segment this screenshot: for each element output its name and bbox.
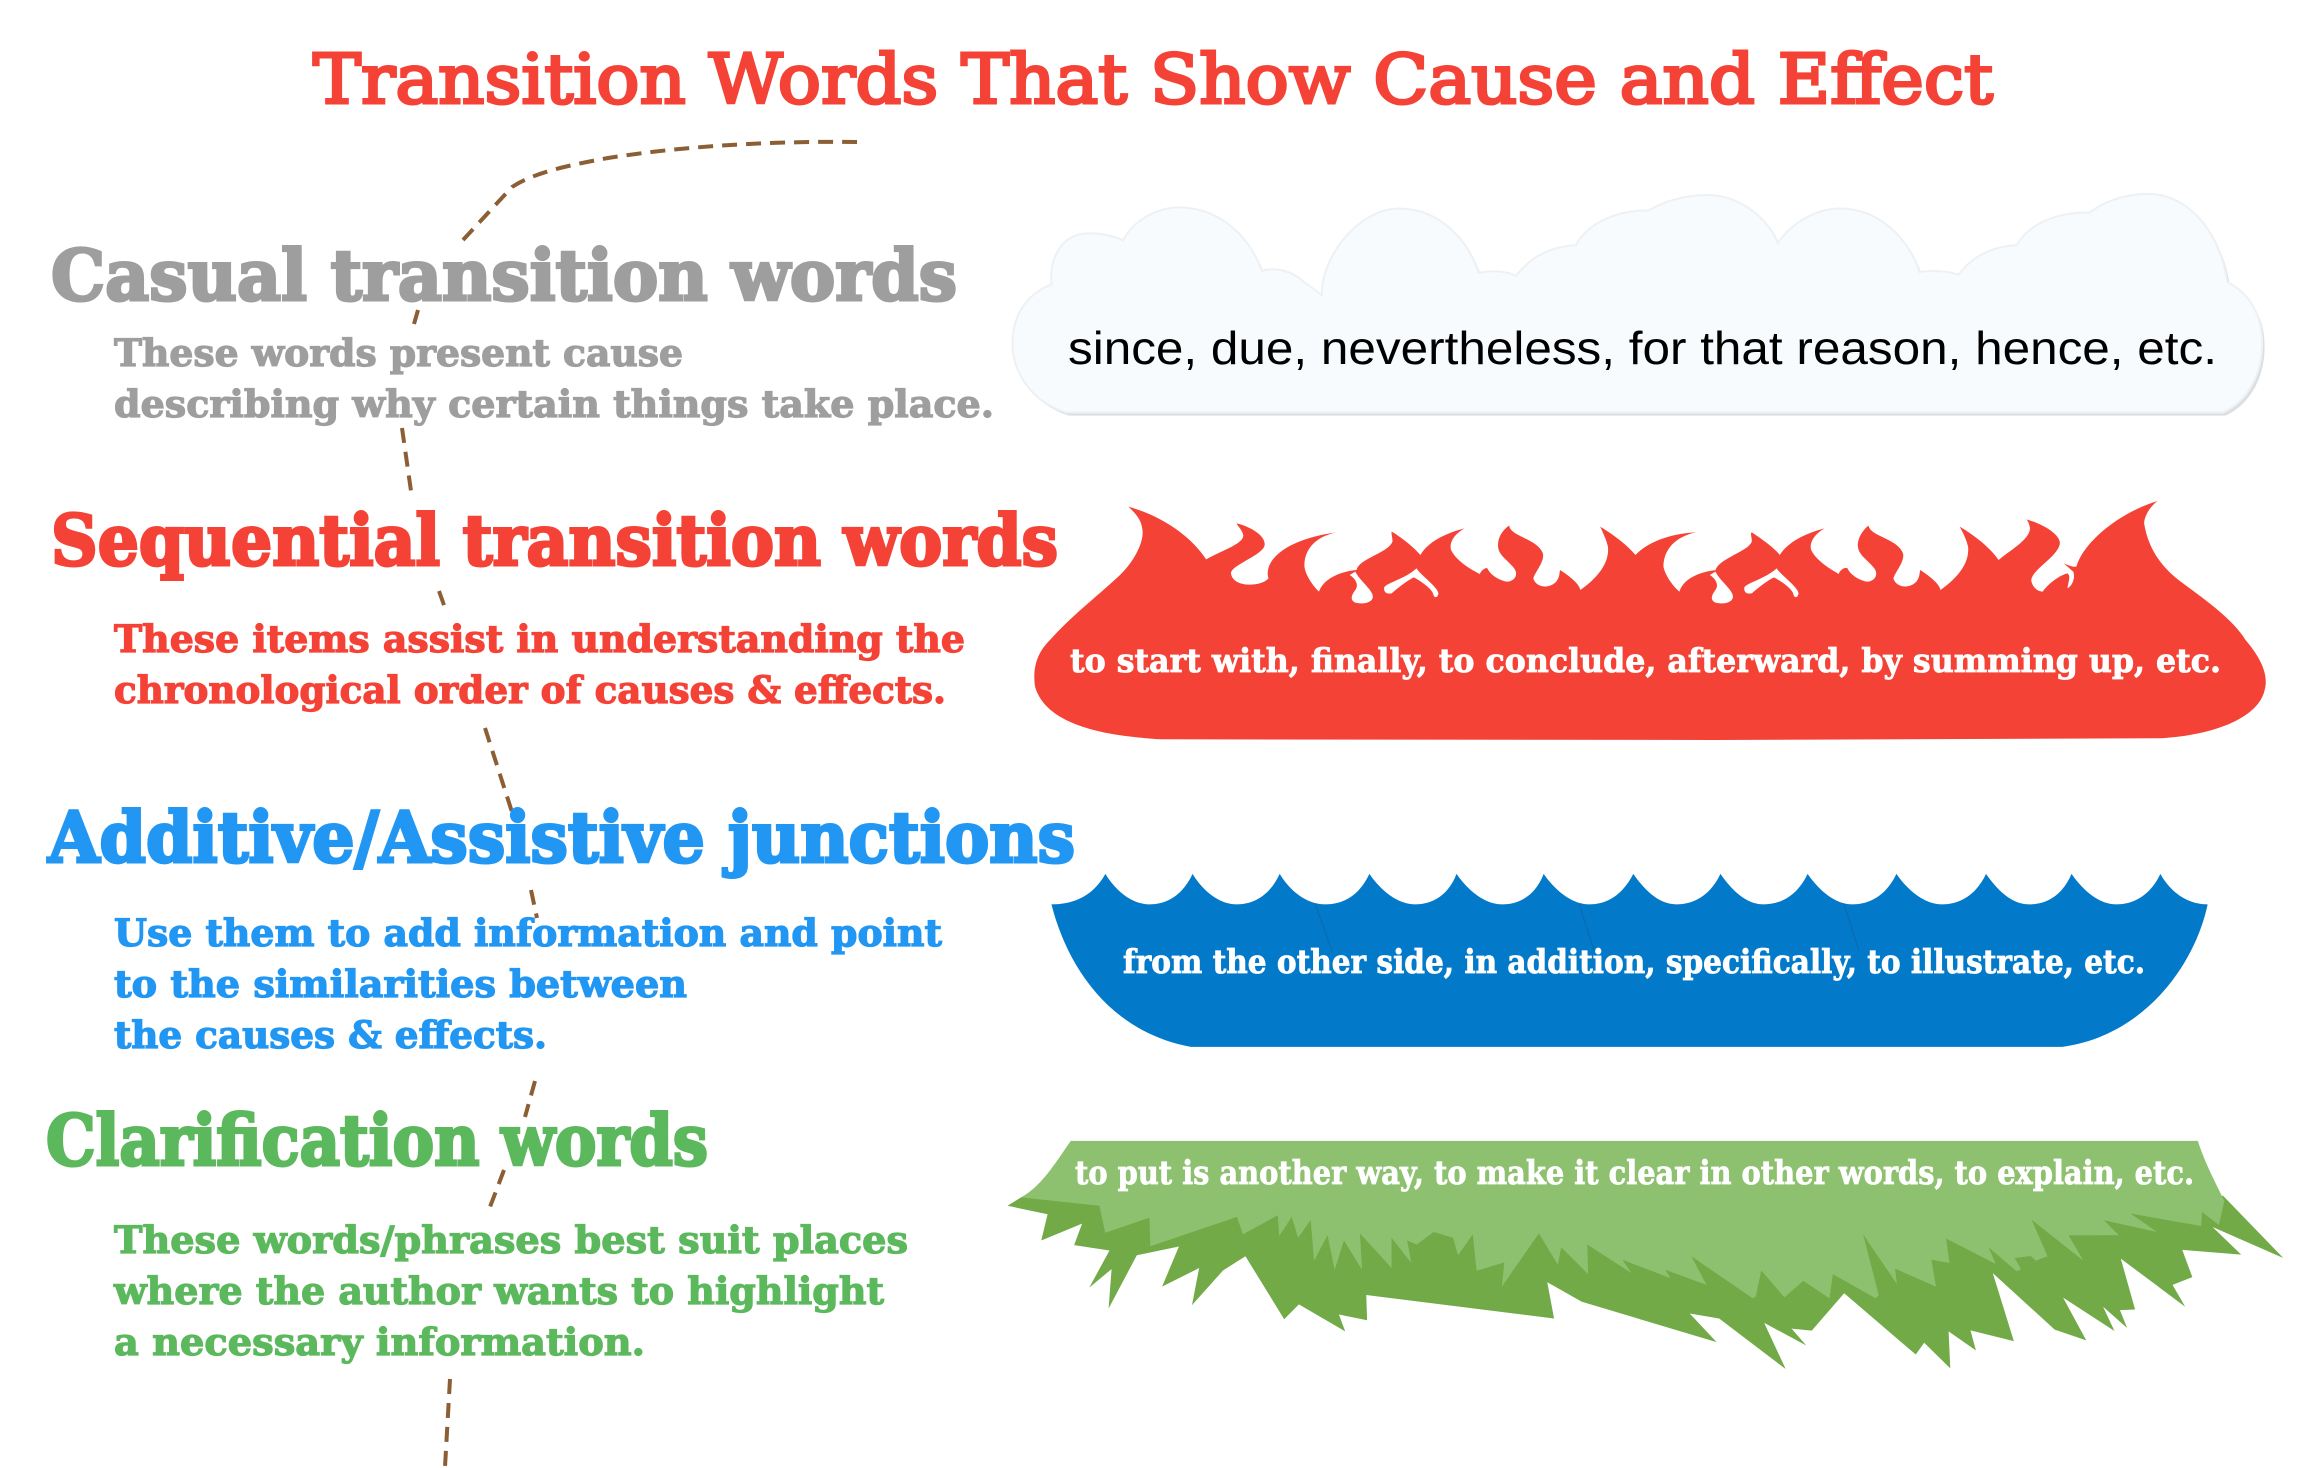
- cloud words: since, due, nevertheless, for that reason, hence, etc.: [1068, 322, 2217, 374]
- panel: casual transition words text: [51, 234, 994, 426]
- dashed connector line: [402, 142, 857, 1467]
- description: casual: These words present cause: [114, 331, 683, 375]
- description: sequential: These items assist in understanding the: [114, 617, 965, 661]
- description: clarification: a necessary information.: [114, 1320, 645, 1364]
- panel: water: [1051, 874, 2208, 1047]
- fire words: to start with, finally, to conclude, afterward, by summing up, etc.: [1070, 641, 2221, 680]
- description: clarification: [113, 1218, 908, 1364]
- cloud shape: [1012, 194, 2265, 416]
- description: additive: Use them to add information and point: [114, 911, 942, 955]
- heading: casual: Casual transition words: [51, 234, 957, 317]
- description: sequential: chronological order of causes & effects.: [114, 668, 946, 712]
- panel: grass: [1008, 1141, 2283, 1369]
- description: sequential: [114, 617, 965, 712]
- fire shape: [1034, 501, 2266, 740]
- panel: additive junctions text: [47, 796, 1075, 1057]
- description: additive: to the similarities between: [114, 962, 687, 1006]
- panel: fire: [1034, 501, 2266, 740]
- description: additive: [114, 911, 942, 1057]
- heading: sequential: Sequential transition words: [51, 499, 1058, 582]
- description: clarification: where the author wants to highlight: [113, 1269, 884, 1313]
- description: clarification: These words/phrases best suit places: [114, 1218, 908, 1262]
- description: casual: [114, 331, 994, 426]
- grass shape: [1008, 1141, 2283, 1369]
- panel: sequential transition words text: [51, 499, 1058, 712]
- title: Transition Words That Show Cause and Effect: [313, 41, 1993, 120]
- heading: additive: Additive/Assistive junctions: [47, 796, 1075, 879]
- panel: clarification words text: [46, 1099, 908, 1364]
- panel: cloud: [1012, 194, 2265, 416]
- water words: from the other side, in addition, specifically, to illustrate, etc.: [1123, 942, 2145, 981]
- description: additive: the causes & effects.: [114, 1013, 547, 1057]
- heading: clarification: Clarification words: [46, 1099, 708, 1182]
- water shape: [1051, 874, 2208, 1047]
- description: casual: describing why certain things take place.: [114, 382, 994, 426]
